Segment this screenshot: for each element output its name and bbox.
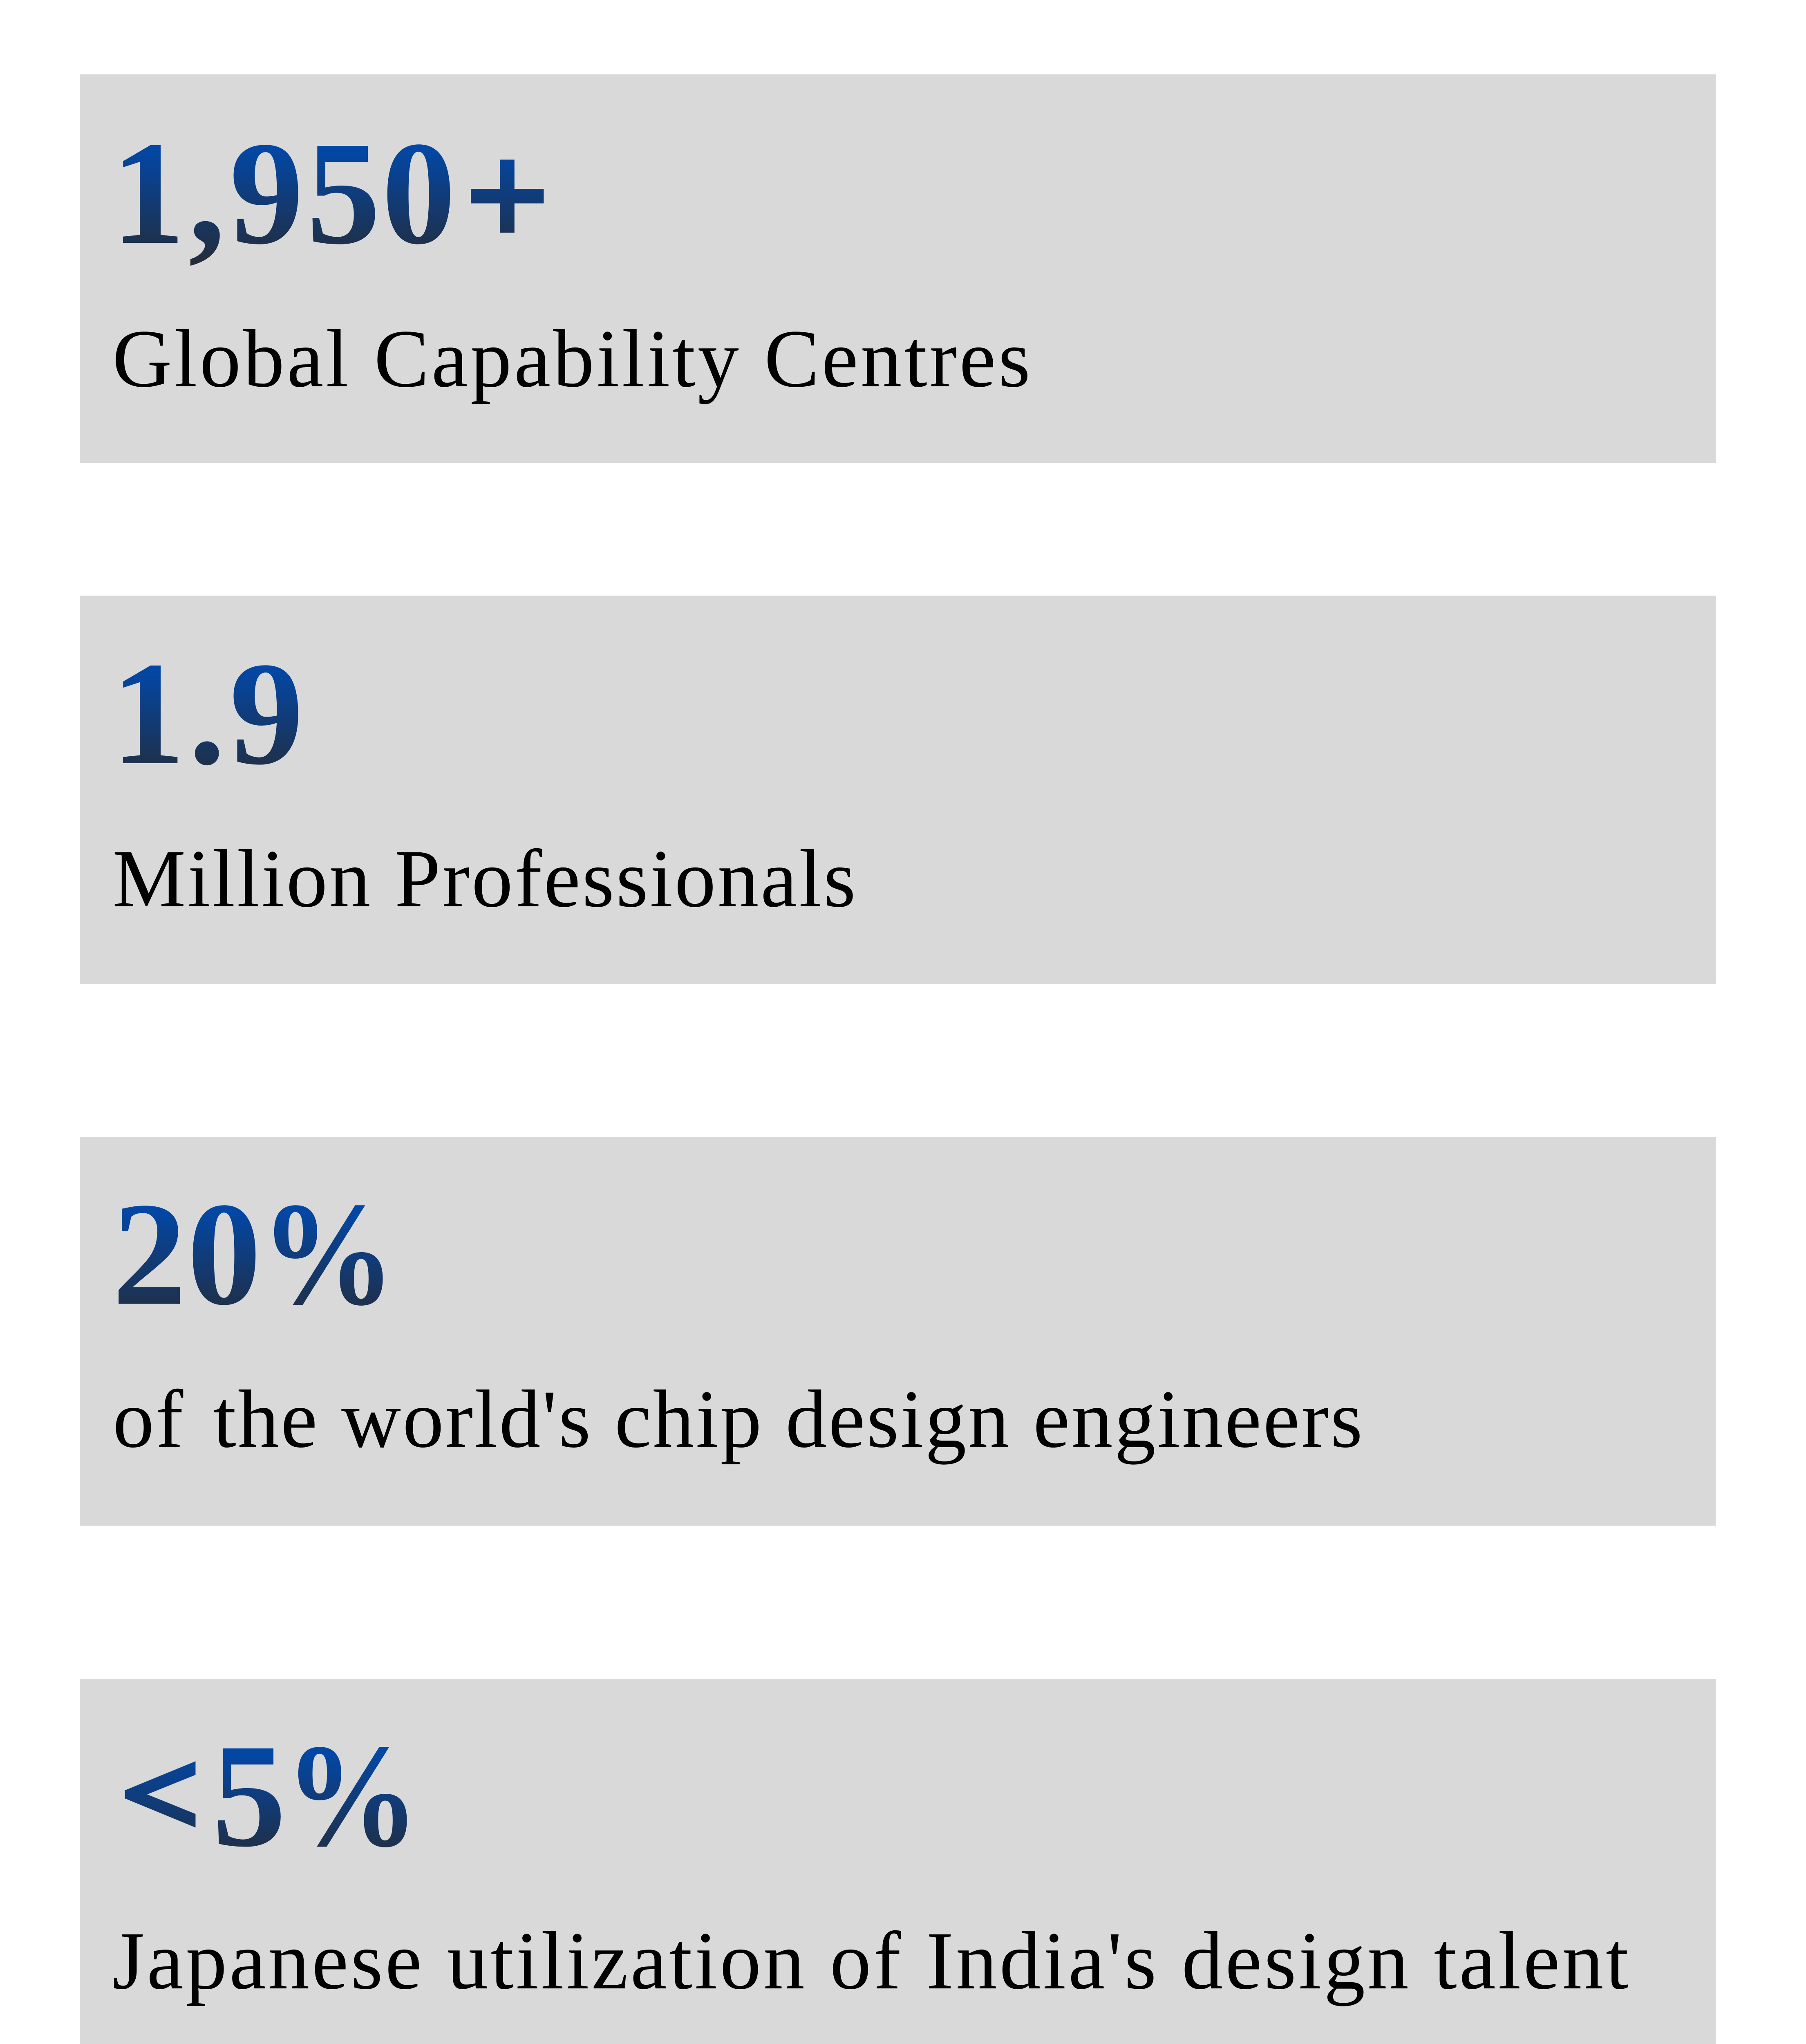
panel: global capability centres xyxy=(80,74,1716,463)
panel: chip design engineers xyxy=(80,1137,1716,1526)
stat number: 1,950+: 1,950 xyxy=(111,111,456,275)
stat label: chip design engineers: of the world's chip design engineers xyxy=(113,1373,1364,1465)
stat number: 20%: 20 xyxy=(112,1172,261,1336)
stat label: global capability centres: Global Capability Centres xyxy=(112,313,1033,404)
panel: japanese utilization xyxy=(80,1679,1716,2044)
stat number: <5%: 5 xyxy=(212,1714,286,1878)
stat number: 20% xyxy=(112,1172,396,1336)
stat number: <5% xyxy=(121,1713,420,1878)
panel: million professionals xyxy=(80,596,1716,984)
stat label: million professionals: Million Professionals xyxy=(112,833,857,924)
stat number: 20%: % xyxy=(260,1172,396,1336)
stat number: 1,950+: + xyxy=(465,114,549,278)
stat label: japanese utilization: Japanese utilization of India's design talent xyxy=(112,1915,1631,2006)
stat number: <5%: % xyxy=(284,1713,420,1877)
stat number: <5%: < xyxy=(121,1729,200,1858)
stat number: 1.9: 1.9 xyxy=(111,632,304,796)
